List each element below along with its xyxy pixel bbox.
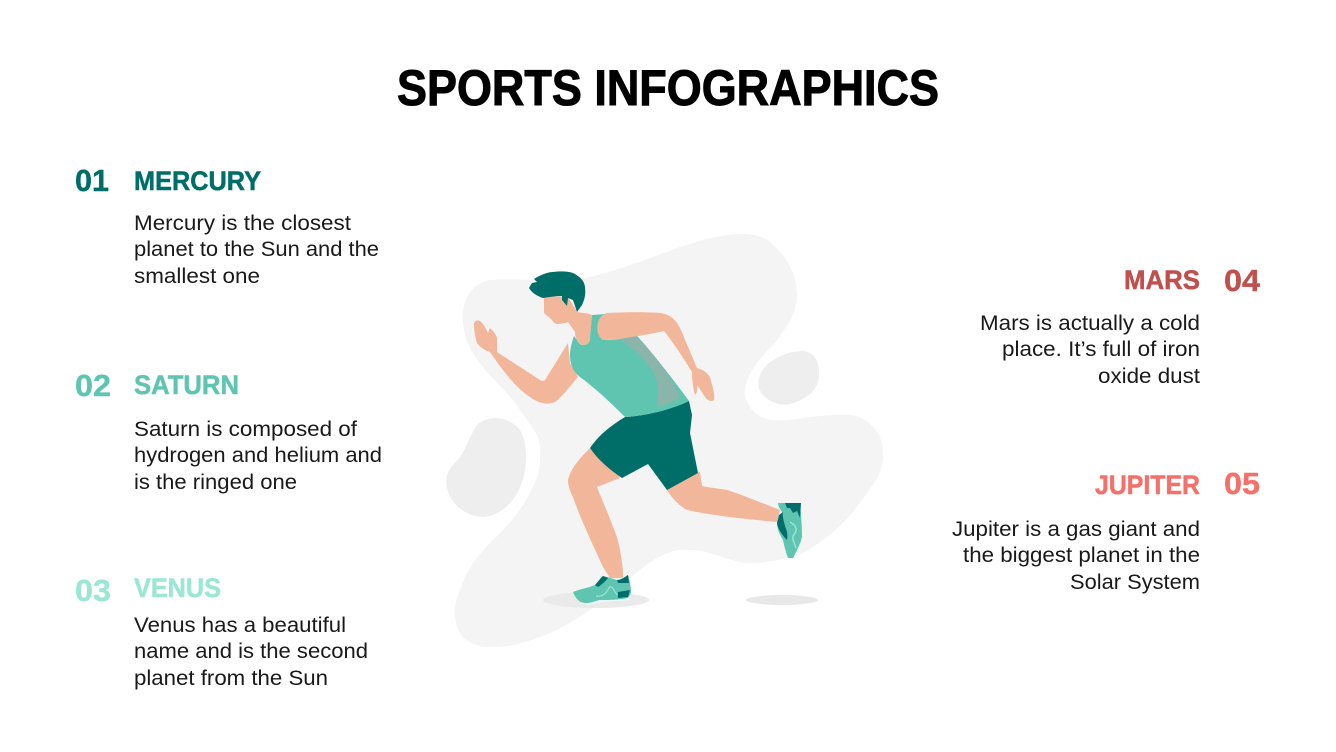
- text: Venus description: planet from the Sun: [134, 667, 328, 690]
- number 01: 01: [75, 163, 109, 198]
- singlet shadow: [619, 336, 680, 407]
- rear arm over singlet: [597, 312, 663, 340]
- text: Mercury description: [134, 212, 379, 288]
- text: Mercury description: planet to the Sun and the: [134, 238, 379, 261]
- number 04: 04: [1224, 263, 1261, 298]
- heading: Mars: MARS: [1124, 265, 1200, 295]
- text: Venus description: Venus has a beautiful: [134, 614, 346, 637]
- text: Mars description: place. It’s full of iron: [1002, 338, 1200, 361]
- text: Mercury description: Mercury is the closest: [134, 212, 351, 235]
- rear arm: [597, 312, 714, 401]
- hair: [529, 271, 585, 312]
- ground shadow rear: [746, 595, 818, 605]
- text: Saturn description: [134, 418, 382, 494]
- illustration: runner on background blobs: [446, 234, 883, 647]
- text: Jupiter description: [952, 518, 1200, 594]
- panel: 02 Saturn: [75, 368, 382, 494]
- front arm: [474, 320, 578, 404]
- text: Mars description: [980, 312, 1200, 388]
- shorts: [590, 401, 698, 490]
- heading: Jupiter: JUPITER: [1095, 470, 1200, 500]
- text: Mars description: oxide dust: [1098, 365, 1200, 388]
- singlet: [570, 314, 689, 417]
- heading: Venus: VENUS: [134, 573, 221, 603]
- panel: 03 Venus: [75, 573, 368, 690]
- panel: 01 Mercury: [75, 163, 379, 288]
- ground shadow front: [543, 592, 649, 608]
- background blob right: [758, 351, 819, 405]
- text: Venus description: [134, 614, 368, 690]
- neck and face: [544, 296, 592, 345]
- text: Jupiter description: the biggest planet in the: [963, 544, 1200, 567]
- text: Venus description: name and is the second: [134, 640, 368, 663]
- rear shoe: [777, 503, 803, 559]
- background blob large: [455, 234, 883, 647]
- text: Mars description: Mars is actually a cold: [980, 312, 1200, 335]
- number 03: 03: [75, 573, 111, 608]
- heading: Saturn: SATURN: [134, 370, 239, 400]
- text: Saturn description: hydrogen and helium and: [134, 444, 382, 467]
- front leg: [568, 448, 623, 578]
- panel: 04 Mars: [980, 263, 1261, 388]
- front shoe: [573, 575, 631, 605]
- heading: Mercury: MERCURY: [134, 166, 261, 196]
- background blob left: [446, 418, 526, 517]
- rear leg: [662, 472, 780, 522]
- number 05: 05: [1224, 466, 1260, 501]
- text: Saturn description: Saturn is composed of: [134, 418, 357, 441]
- text: Saturn description: is the ringed one: [134, 471, 297, 494]
- panel: 05 Jupiter: [952, 466, 1260, 594]
- number 02: 02: [75, 368, 111, 403]
- text: Jupiter description: Jupiter is a gas giant and: [952, 518, 1200, 541]
- title: SPORTS INFOGRAPHICS: [397, 60, 939, 116]
- text: Jupiter description: Solar System: [1070, 571, 1200, 594]
- text: Mercury description: smallest one: [134, 265, 260, 288]
